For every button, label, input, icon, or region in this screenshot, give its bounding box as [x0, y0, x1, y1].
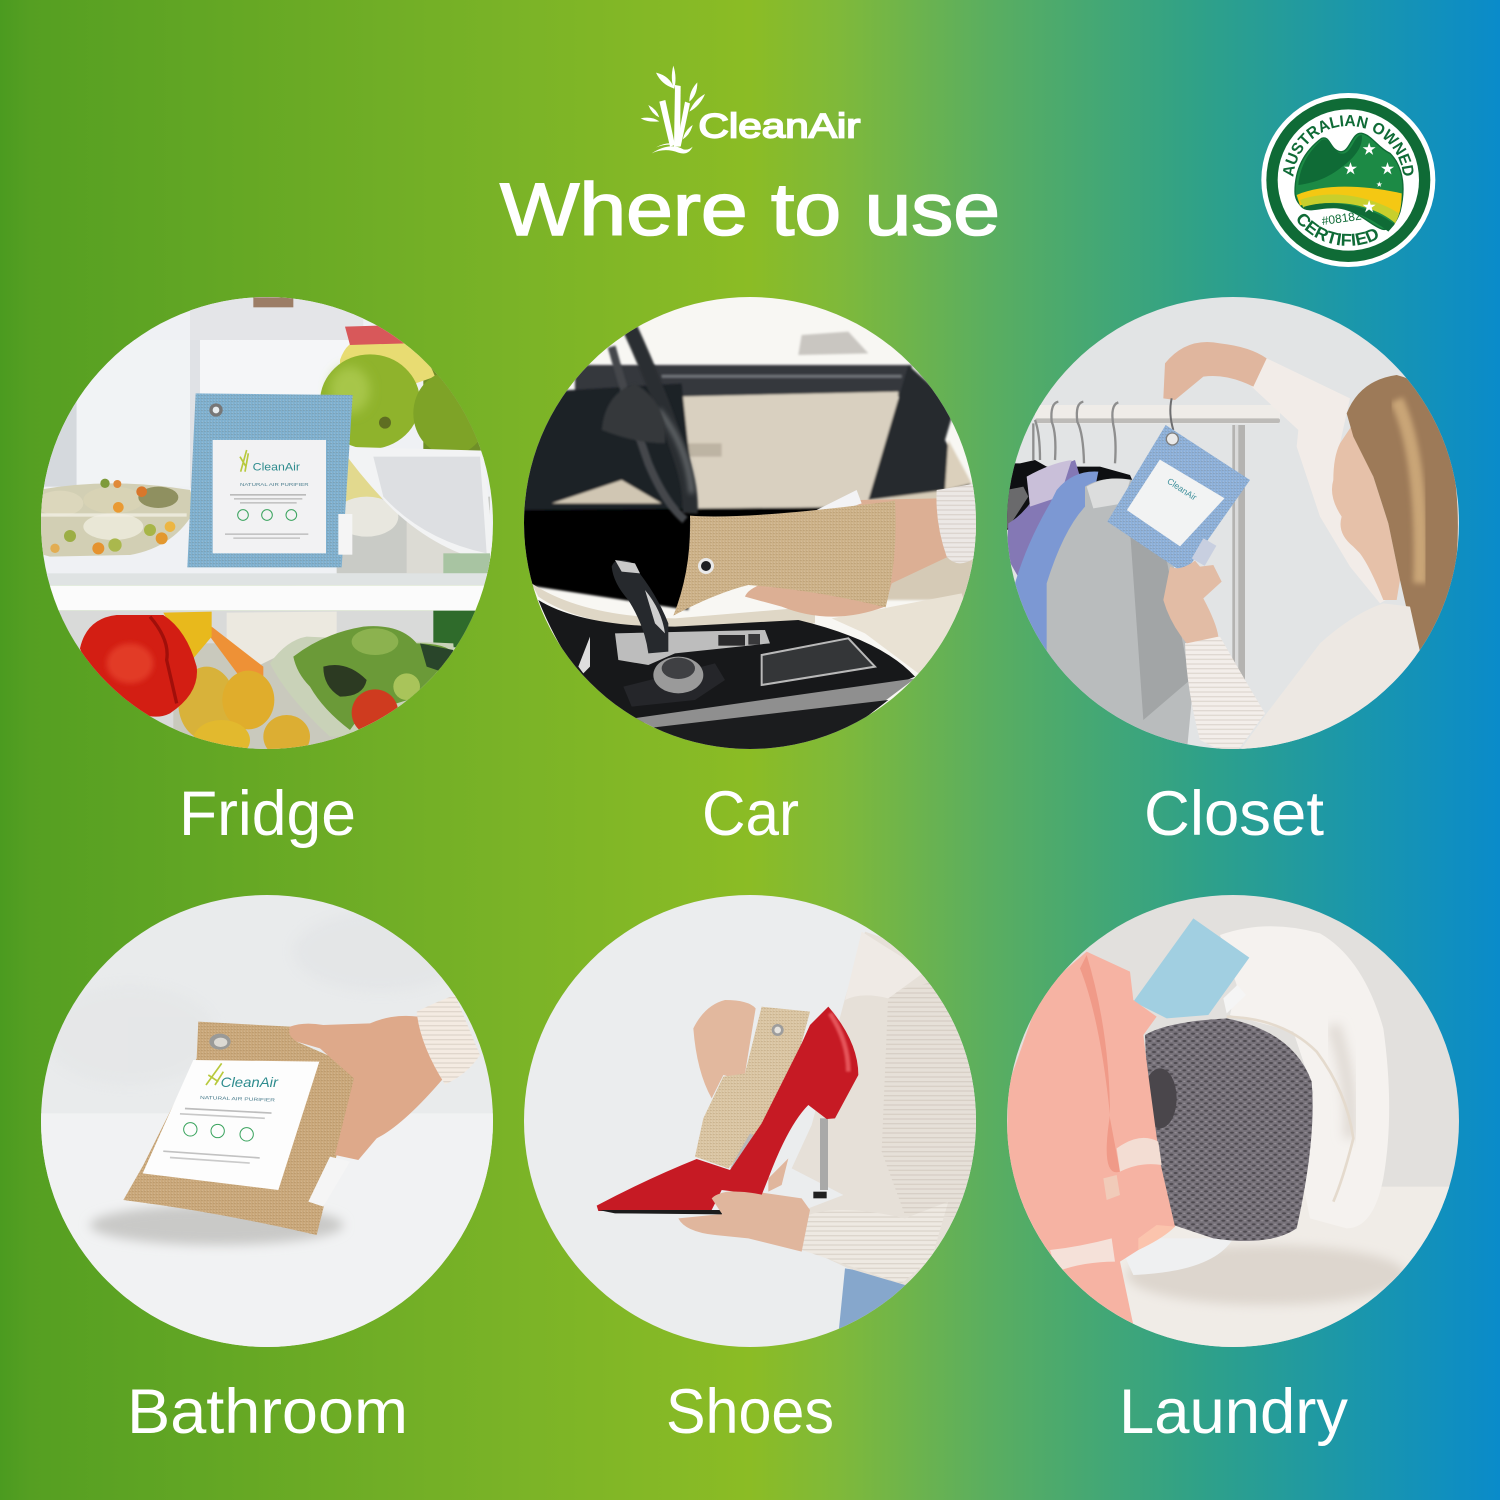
console trim: [532, 583, 815, 630]
raised sweater arm: [1252, 358, 1392, 603]
photo: bathroom: CleanAir: [221, 1074, 279, 1090]
map of Australia: [1295, 133, 1403, 232]
air purifier bag: [187, 393, 353, 567]
bowl: [337, 497, 490, 573]
badge: Australian Owned Certified: [1261, 93, 1436, 267]
gear shifter: [612, 560, 668, 653]
sleeve: [417, 995, 480, 1084]
map of Australia: ★: [1344, 162, 1358, 178]
photo: car: [515, 290, 985, 760]
raised hand: [1163, 342, 1267, 400]
hand: [289, 1016, 443, 1160]
label: Fridge: Fridge: [179, 779, 356, 849]
label: Closet: Closet: [1144, 779, 1324, 849]
jute bag: [123, 1022, 355, 1235]
heel: [820, 1118, 828, 1190]
bowl: [1117, 1238, 1233, 1275]
glass dish with vegetables: [38, 483, 197, 557]
grey knit: [1145, 1018, 1313, 1241]
photo: laundry: [1000, 885, 1470, 1355]
hand on bag: [693, 1000, 756, 1098]
photo: fridge: [30, 290, 503, 761]
title: Where to use: [500, 168, 1000, 251]
lace trim: [1117, 1138, 1162, 1172]
sweater: [792, 932, 982, 1285]
map of Australia: ★: [1381, 162, 1395, 178]
photo: closet: CleanAir: [1165, 476, 1199, 503]
icon: bamboo: [641, 66, 705, 154]
photo: closet: [1000, 290, 1470, 760]
photo: fridge: CleanAir: [253, 462, 300, 474]
pink garment: [1007, 952, 1175, 1325]
blue bag: [1107, 425, 1250, 573]
lower shelf contents: [58, 610, 476, 749]
photo: bathroom: [30, 885, 500, 1355]
hand under shoe: [678, 1191, 810, 1252]
panel: laundry: [1000, 885, 1470, 1447]
label: Bathroom: Bathroom: [127, 1377, 408, 1447]
label: [143, 1060, 319, 1190]
sweater body: [1241, 604, 1420, 749]
tag: [308, 1157, 350, 1207]
tag: [816, 490, 862, 510]
face: [1332, 423, 1400, 600]
panel: shoes: [515, 885, 985, 1447]
jeans: [838, 1268, 908, 1335]
jar behind apples: [340, 342, 435, 384]
shirts: [1007, 487, 1028, 530]
stars: ★: [1363, 142, 1377, 158]
salad in glass bowl: [270, 637, 457, 737]
hand and sleeve: [745, 498, 948, 617]
hook: [1170, 398, 1173, 430]
steering wheel: [630, 328, 690, 513]
photo: fridge: NATURAL AIR PURIFIER: [240, 482, 309, 487]
woman hair: [1347, 375, 1458, 667]
jute bag: [673, 501, 896, 616]
label: Laundry: Laundry: [1119, 1377, 1348, 1447]
code number: #08182: [1321, 209, 1363, 228]
panel: car: [515, 290, 985, 849]
ring text: Australian Owned: AUSTRALIAN OWNED: [1283, 115, 1414, 177]
blue bag: [1133, 918, 1249, 1018]
wordmark: CleanAir: [698, 107, 860, 145]
white towel: [1220, 926, 1389, 1228]
label: Car: Car: [702, 779, 799, 849]
map of Australia: ★: [1376, 181, 1383, 189]
red shoe: [597, 1007, 858, 1211]
panel: fridge: [30, 290, 503, 849]
red pepper: [80, 615, 197, 717]
photo: shoes: [515, 885, 985, 1355]
label: Shoes: Shoes: [666, 1377, 834, 1447]
ring text: Certified: CERTIFIED: [1298, 214, 1378, 246]
thumb: [712, 1192, 808, 1225]
shelf: [30, 573, 500, 585]
apples: [320, 354, 420, 449]
panel: bathroom: [30, 885, 500, 1447]
photo: bathroom: NATURAL AIR PURIFIER: [200, 1095, 276, 1103]
logo: CleanAir: [641, 66, 860, 154]
panel: closet: [1000, 290, 1470, 849]
jute bag: [695, 1007, 810, 1168]
hangers: [1033, 402, 1118, 463]
map of Australia: ★: [1363, 200, 1377, 216]
lower hand: [1163, 561, 1222, 643]
